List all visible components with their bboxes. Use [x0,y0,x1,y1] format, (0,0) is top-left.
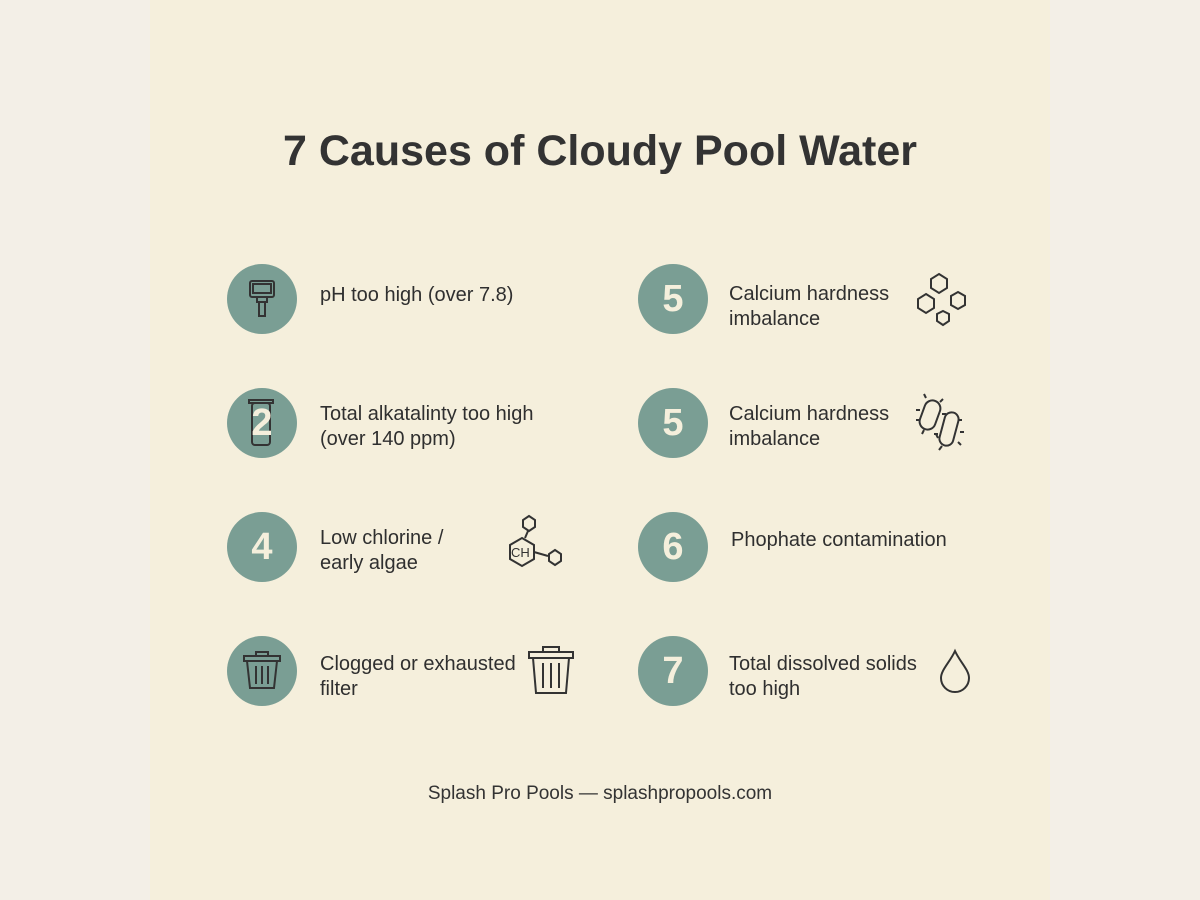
item 5b text [729,403,889,450]
item 7 text [729,653,917,700]
icon: water drop [940,648,970,693]
item 5b circle [638,388,708,458]
item 2 circle: 2 [251,402,273,444]
icon: hexagons [917,272,966,326]
item 7 circle [638,636,708,706]
item 5b text: Calcium hardness [729,403,889,425]
item 6 circle: 6 [662,526,684,568]
icon: trash [528,646,574,694]
item 2 text: (over 140 ppm) [320,428,456,450]
item 4 circle [227,512,297,582]
item 3 text [320,653,516,700]
item 5 circle [638,264,708,334]
item 5 text [729,283,889,330]
item 4 text: Low chlorine / [320,527,443,549]
item 3 text: Clogged or exhausted [320,653,516,675]
item 7 circle: 7 [662,650,684,692]
title: 7 Causes of Cloudy Pool Water [283,127,917,175]
item 6 circle [638,512,708,582]
item 4 text: early algae [320,552,418,574]
panel: background [150,0,1050,900]
item 3 circle with trash icon [227,636,297,706]
item 2 circle [227,388,297,458]
item 3 text: filter [320,678,358,700]
item 2 text: Total alkatalinty too high [320,403,533,425]
item 7 text: Total dissolved solids [729,653,917,675]
item 6 text: Phophate contamination [731,529,947,551]
item 5 text: Calcium hardness [729,283,889,305]
footer: Splash Pro Pools — splashpropools.com [428,783,772,804]
item 5b text: imbalance [729,428,820,450]
item 4 circle: 4 [251,526,273,568]
item 5 circle: 5 [662,278,684,320]
item 5 text: imbalance [729,308,820,330]
item 4 text [320,527,444,574]
item 7 text: too high [729,678,800,700]
icon: molecule: CH [511,545,530,560]
item 1 circle with pH meter icon [227,264,297,334]
icon: bacteria [916,394,964,451]
item 1 text: pH too high (over 7.8) [320,284,513,306]
icon: molecule [509,514,562,568]
item 5b circle: 5 [662,402,684,444]
item 2 text [320,403,533,450]
